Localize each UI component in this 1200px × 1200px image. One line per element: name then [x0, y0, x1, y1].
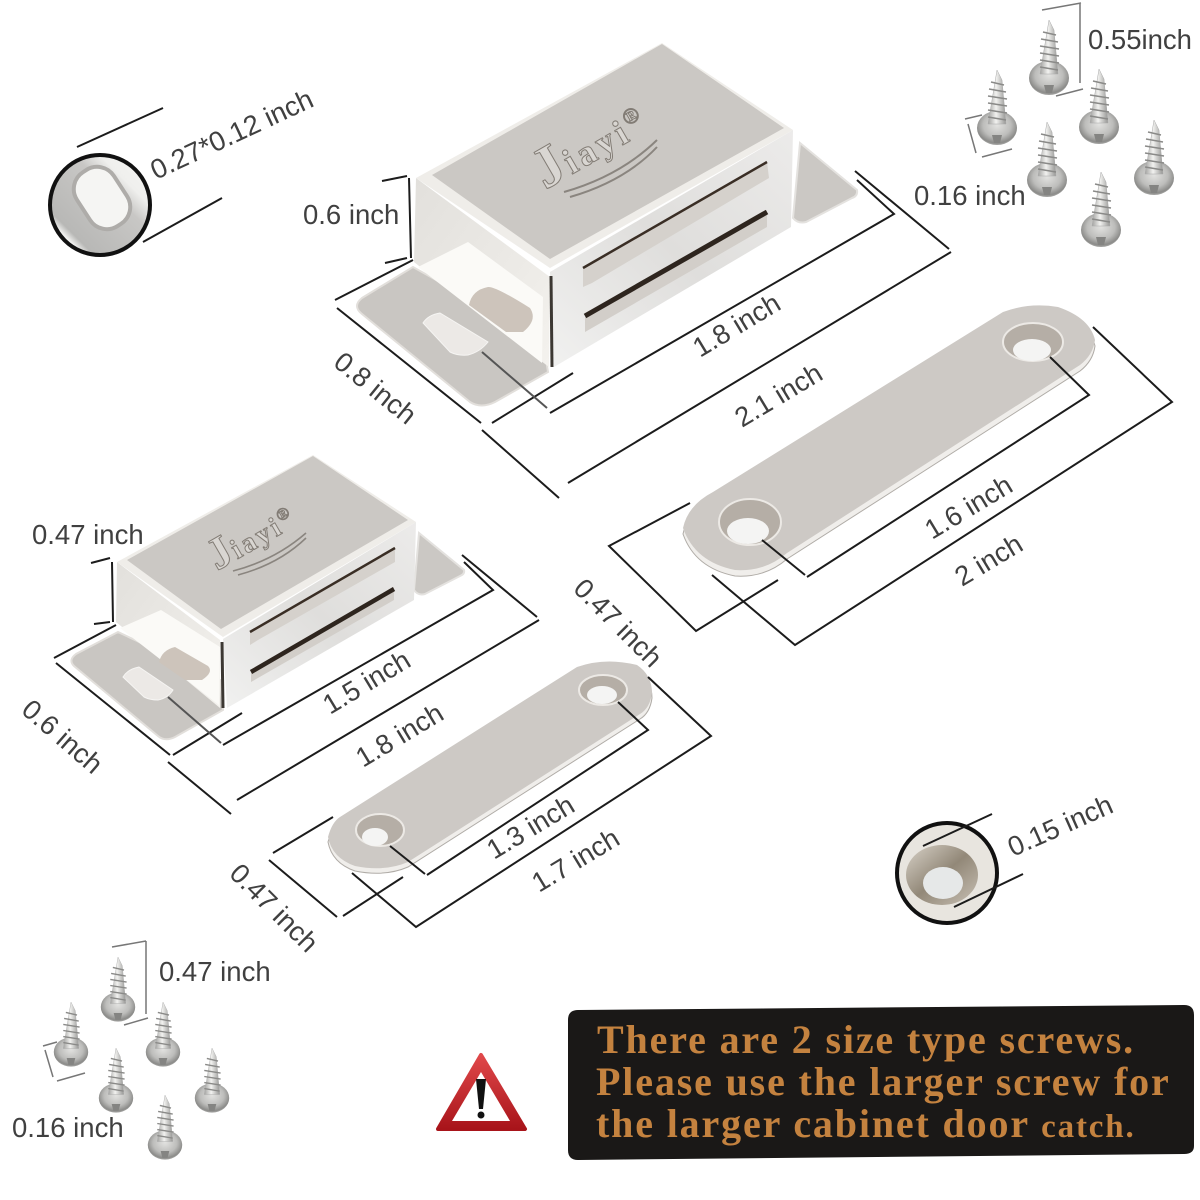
dimension labels: 0.47 inch: [159, 956, 271, 987]
logo: ®: [272, 502, 293, 525]
top face frame: [416, 43, 793, 268]
callout: the larger cabinet door catch.: [596, 1101, 1136, 1146]
dimension labels: 1.5 inch: [317, 644, 416, 720]
dimension labels: 0.6 inch: [303, 199, 399, 230]
small screws: [54, 957, 229, 1160]
tan magnet: [159, 647, 210, 680]
small strike plate: [328, 661, 652, 873]
right tab: [793, 143, 857, 222]
dimension labels: 2.1 inch: [729, 357, 828, 433]
front face: [223, 522, 416, 708]
dimension labels: 1.7 inch: [526, 822, 625, 898]
right tab: [414, 533, 464, 594]
large screws: [977, 20, 1174, 247]
front face: [550, 130, 793, 367]
magnet slots: [583, 162, 769, 287]
left face: [414, 178, 550, 367]
label: 0.27*0.12 inch: [145, 83, 318, 185]
label: 0.15 inch: [1003, 789, 1117, 862]
top face: [432, 44, 784, 259]
dimension labels: 1.8 inch: [687, 287, 786, 363]
dimension labels: 0.47 inch: [568, 572, 669, 673]
inner opening: [120, 610, 220, 705]
large strike plate: [683, 305, 1095, 576]
base plate: [71, 632, 223, 739]
dimension labels: 2 inch: [949, 528, 1028, 592]
dimension labels: 1.3 inch: [481, 789, 580, 865]
logo: ®: [617, 101, 644, 131]
dimension labels: 1.6 inch: [919, 469, 1018, 545]
dimension labels: 0.47 inch: [224, 857, 325, 958]
left face: [116, 562, 220, 708]
dimension labels: 0.16 inch: [12, 1112, 124, 1143]
dimension labels: 0.6 inch: [16, 693, 109, 780]
dimension lines: [54, 171, 1172, 927]
round hole detail: [897, 789, 1117, 923]
logo: Jiayi: [197, 511, 289, 580]
inner opening: [418, 242, 543, 363]
logo: Jiayi: [519, 111, 638, 201]
dimension labels: 0.47 inch: [32, 519, 144, 550]
callout: There are 2 size type screws.: [597, 1017, 1135, 1062]
warning icon: [438, 1055, 525, 1129]
plate slot: [423, 313, 488, 355]
dimension labels: 1.8 inch: [350, 697, 449, 773]
top face frame: [117, 455, 416, 637]
callout: [568, 1005, 1194, 1160]
top face: [127, 456, 408, 629]
small magnetic latch: [71, 455, 464, 739]
oval hole detail: [50, 83, 318, 255]
magnet slots: [250, 548, 395, 645]
plate slot: [123, 667, 173, 700]
logo: [197, 490, 306, 580]
tan magnet: [469, 287, 533, 332]
dimension labels: 0.16 inch: [914, 180, 1026, 211]
screw dimension lines: [43, 3, 1083, 1081]
logo: [519, 85, 657, 201]
large magnetic latch: [357, 43, 857, 406]
callout: Please use the larger screw for: [596, 1059, 1171, 1104]
base plate: [357, 267, 548, 406]
dimension labels: 0.55inch: [1088, 24, 1192, 55]
dimension labels: 0.8 inch: [328, 346, 423, 430]
